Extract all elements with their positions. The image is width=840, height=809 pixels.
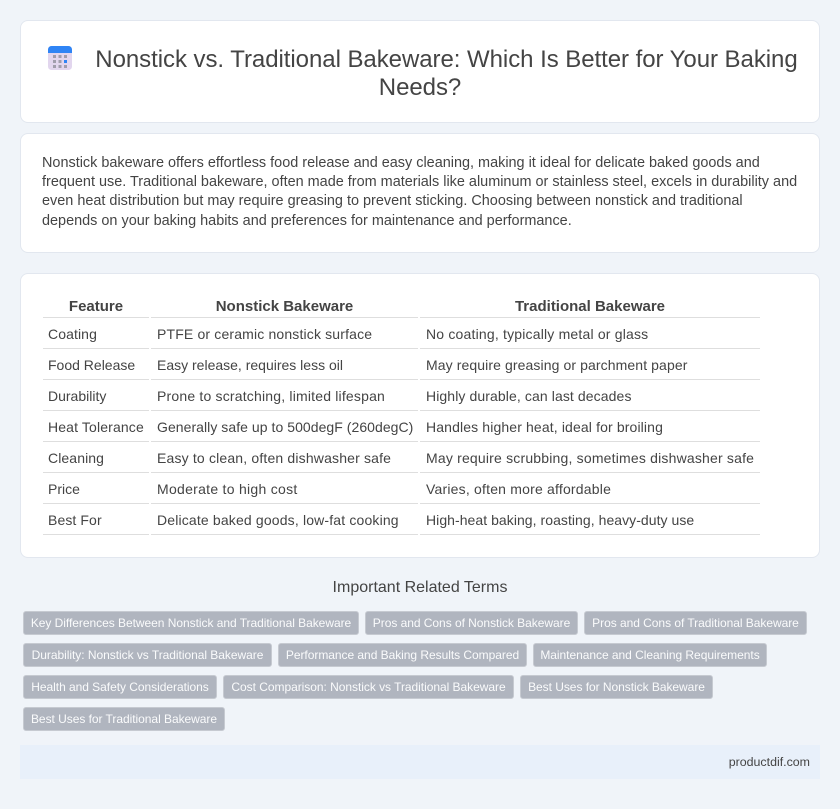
table: comparison: May require greasing or parchment paper [426, 357, 687, 373]
table: comparison: PTFE or ceramic nonstick surface [157, 326, 372, 342]
text block: introduction: even heat distribution but may require greasing to prevent sticking. Choosing between nonstick and traditional [42, 193, 743, 209]
table: comparison: Generally safe up to 500degF (260degC) [157, 419, 413, 435]
table: comparison: Cleaning [48, 450, 104, 466]
table: comparison: Highly durable, can last decades [426, 388, 632, 404]
table: comparison: High-heat baking, roasting, heavy-duty use [426, 512, 694, 528]
table: comparison: Easy to clean, often dishwasher safe [157, 450, 391, 466]
panel: comparison table [20, 273, 820, 558]
table: comparison: Varies, often more affordable [426, 481, 611, 497]
table: comparison: Traditional Bakeware [515, 298, 665, 315]
table: comparison: Moderate to high cost [157, 481, 298, 497]
table: comparison: Coating [48, 326, 97, 342]
table: comparison: Feature [69, 298, 123, 315]
title: Nonstick vs. Traditional Bakeware: Which Is Better for Your Baking [95, 46, 798, 73]
text block: introduction [42, 155, 797, 229]
tag list: related terms: Performance and Baking Results Compared [286, 648, 519, 662]
table: comparison: Delicate baked goods, low-fat cooking [157, 512, 399, 528]
table: comparison: Nonstick Bakeware [216, 298, 353, 315]
title: Needs? [379, 74, 461, 101]
tag list: related terms: Maintenance and Cleaning Requirements [540, 648, 760, 662]
heading: related terms: Important Related Terms [333, 579, 507, 596]
tag list: related terms: Best Uses for Nonstick Bakeware [528, 680, 705, 694]
table: comparison: No coating, typically metal or glass [426, 326, 648, 342]
tag list: related terms: Pros and Cons of Traditional Bakeware [592, 616, 799, 630]
table: comparison: Price [48, 481, 80, 497]
tag list: related terms: Health and Safety Considerations [31, 680, 209, 694]
table: comparison: Prone to scratching, limited lifespan [157, 388, 385, 404]
panel: introduction [20, 133, 820, 253]
table: comparison: Durability [48, 388, 106, 404]
tag list: related terms: Key Differences Between Nonstick and Traditional Bakeware [31, 616, 351, 630]
title [95, 46, 798, 101]
tag list: related terms: Best Uses for Traditional Bakeware [31, 712, 217, 726]
tag list: related terms: Pros and Cons of Nonstick Bakeware [373, 616, 570, 630]
table: comparison: May require scrubbing, sometimes dishwasher safe [426, 450, 754, 466]
table: comparison: Food Release [48, 357, 135, 373]
tag list: related terms [23, 611, 807, 731]
table: comparison: Handles higher heat, ideal for broiling [426, 419, 663, 435]
table: comparison: Heat Tolerance [48, 419, 144, 435]
text block: introduction: frequent use. Traditional bakeware, often made from materials like aluminum or stainless steel, excels in durability and [42, 174, 797, 190]
table: comparison [43, 298, 760, 535]
text block: introduction: depends on your baking habits and preferences for maintenance and performance. [42, 213, 572, 229]
tag list: related terms: Cost Comparison: Nonstick vs Traditional Bakeware [231, 680, 506, 694]
panel: title header [20, 20, 820, 123]
text block: introduction: Nonstick bakeware offers effortless food release and easy cleaning, making it ideal for delicate baked goods and [42, 155, 760, 171]
footer bar [20, 745, 820, 779]
footer source: productdif.com [729, 755, 810, 769]
table: comparison: Easy release, requires less oil [157, 357, 343, 373]
tag list: related terms: Durability: Nonstick vs Traditional Bakeware [32, 648, 263, 662]
table: comparison: Best For [48, 512, 102, 528]
icon: calendar [48, 46, 72, 70]
